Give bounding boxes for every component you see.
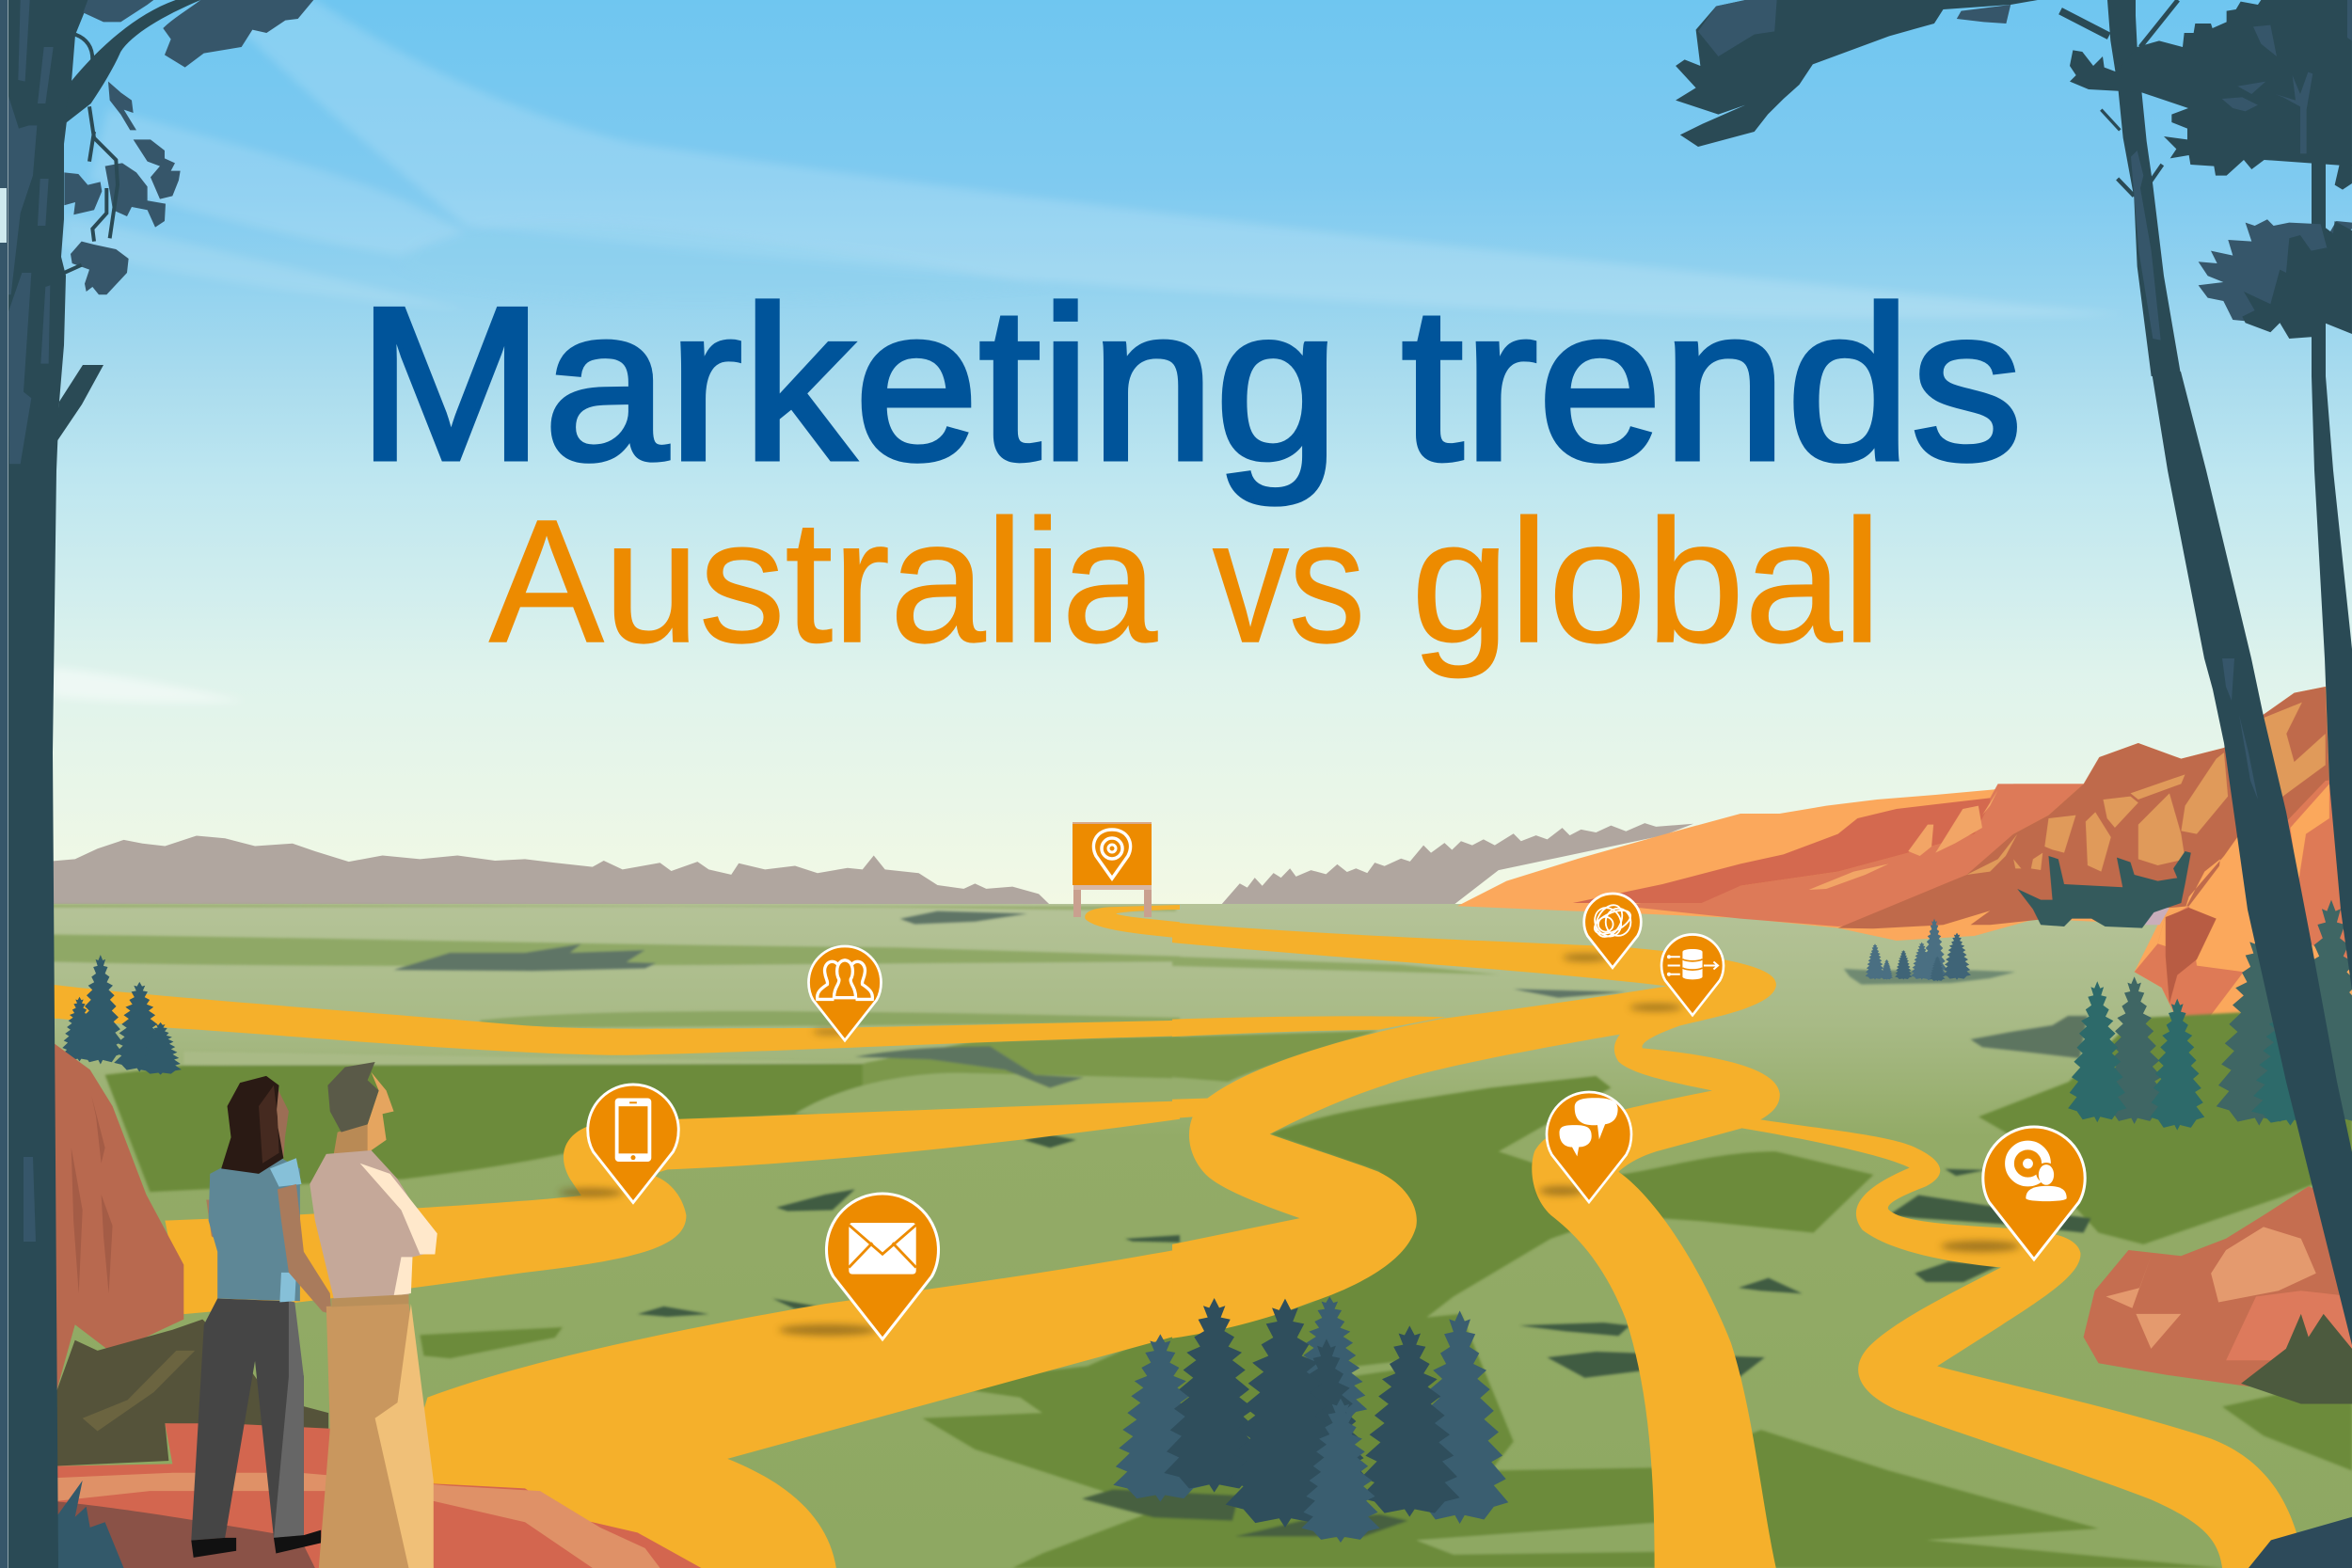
- distant forest right: [1221, 823, 1693, 905]
- tree: right foreground: [1676, 0, 2352, 1568]
- sign: destination marker: [1073, 822, 1152, 917]
- rock at bottom right: [2249, 1517, 2352, 1568]
- pin: conversation: [1547, 1092, 1631, 1202]
- red cliffs right: [1457, 687, 2352, 1044]
- couple looking at the view: [191, 1062, 437, 1568]
- subheading: Australia vs global: global: [1411, 484, 1882, 679]
- pin: data hub: [1661, 935, 1724, 1015]
- subheading: Australia vs global: [489, 484, 1882, 679]
- pin: target audience: [1983, 1127, 2085, 1259]
- road: left half: [46, 905, 1180, 1568]
- second trunk: [2312, 160, 2352, 990]
- subheading: Australia vs global: vs: [1213, 484, 1365, 679]
- bark: [8, 0, 54, 464]
- roads: [46, 905, 2305, 1568]
- pin shadows: [559, 954, 2020, 1336]
- distant hills left: [45, 835, 1050, 905]
- red rock right: [2084, 1186, 2352, 1403]
- tree: left foreground: [0, 0, 313, 1568]
- pin: phone: [588, 1085, 678, 1202]
- canopy right: [2070, 0, 2352, 176]
- pin: tangled data: [1584, 894, 1641, 968]
- foreground cliff and rocks: [51, 1041, 701, 1568]
- field patches: [46, 904, 2352, 1568]
- subheading: Australia vs global: Australia: [489, 484, 1158, 679]
- road: right half: [1172, 923, 2305, 1568]
- heading: Marketing trends: Marketing trends: [358, 262, 2023, 506]
- trunk: [2152, 372, 2352, 1345]
- canopy left arm highlight: [1698, 0, 2010, 56]
- woman: [191, 1076, 331, 1558]
- hanging leaves: [64, 82, 181, 294]
- title: [358, 262, 2023, 679]
- cliff bush: [2017, 851, 2191, 928]
- upper trunk: [2107, 0, 2181, 376]
- foliage top: [83, 0, 313, 68]
- far grove: [1866, 919, 1971, 981]
- right teal evergreens: [2068, 900, 2352, 1131]
- man: [310, 1062, 437, 1568]
- pin: email: [826, 1194, 939, 1339]
- ground: [0, 904, 2352, 1568]
- left small evergreens: [61, 955, 182, 1075]
- pin: people: [809, 946, 881, 1040]
- sky: [0, 0, 2352, 912]
- lower foliage: [2199, 219, 2352, 323]
- central evergreen grove: [1113, 1296, 1508, 1543]
- clouds: [53, 0, 2130, 703]
- canopy left arm: [1676, 0, 2038, 147]
- branch: [63, 0, 200, 125]
